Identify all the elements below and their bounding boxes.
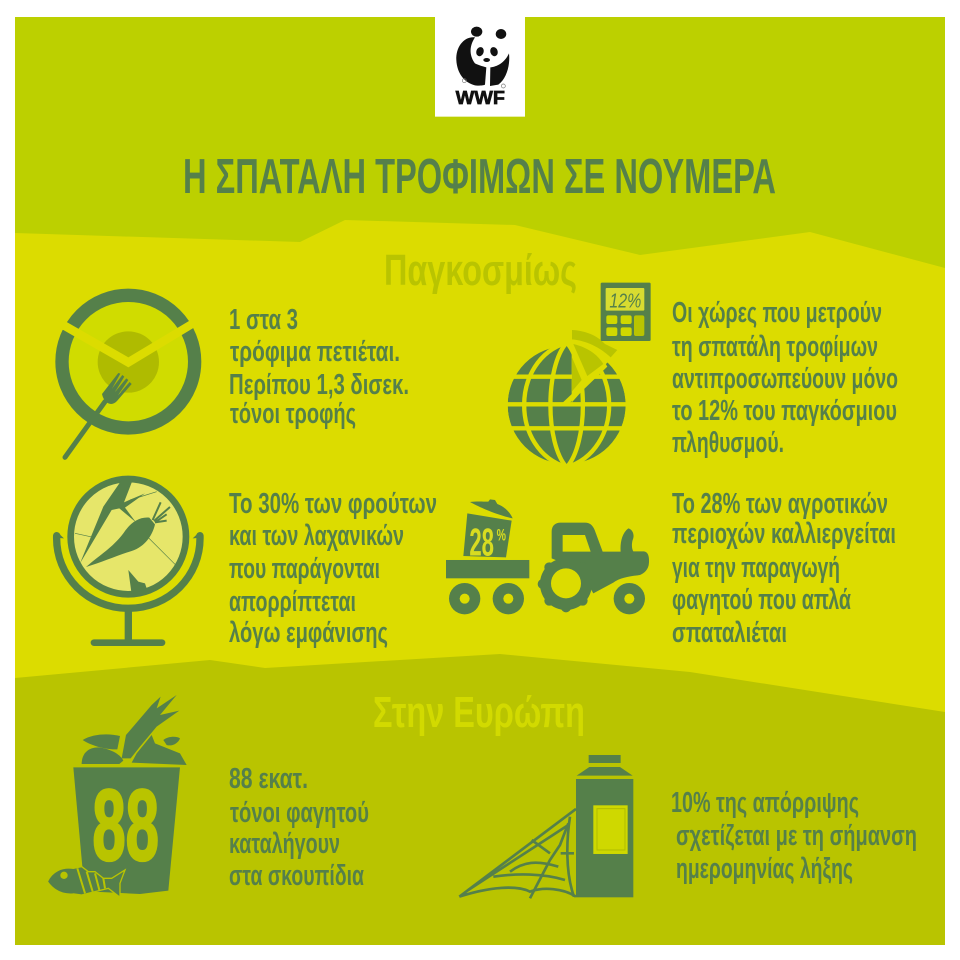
text: 1 in 3: τρόφιμα πετιέται. bbox=[230, 336, 400, 368]
text: 88 million tonnes: καταλήγουν bbox=[229, 828, 340, 860]
text: 30 percent of fruits and vegetables: λόγω εμφάνισης bbox=[229, 617, 388, 649]
heading: Europe: Στην Ευρώπη bbox=[373, 688, 585, 737]
WWF logo: WWF bbox=[456, 87, 505, 108]
top background band bbox=[15, 17, 945, 277]
text: 1 in 3 bbox=[229, 304, 409, 430]
text: 10 percent date labelling: 10% της απόρριψης bbox=[671, 787, 859, 819]
heading: global: Παγκοσμίως bbox=[384, 246, 577, 295]
text: 88 million tonnes bbox=[229, 763, 369, 892]
text: 28 percent of agricultural areas bbox=[672, 488, 896, 649]
text: 1 in 3: 1 στα 3 bbox=[229, 304, 298, 336]
text: 10 percent date labelling bbox=[671, 787, 917, 885]
icon: trash bin with 88: 88 bbox=[92, 769, 159, 882]
text: 10 percent date labelling: ημερομηνίας λήξης bbox=[676, 853, 853, 885]
text: 28 percent of agricultural areas: για την παραγωγή bbox=[672, 552, 840, 584]
text: 28 percent of agricultural areas: φαγητού που απλά bbox=[672, 584, 851, 616]
text: 30 percent of fruits and vegetables bbox=[229, 488, 437, 649]
text: countries measuring waste bbox=[672, 297, 898, 459]
text: 88 million tonnes: τόνοι φαγητού bbox=[230, 797, 369, 829]
icon: globe with calculator: 12% bbox=[609, 290, 641, 313]
text: 30 percent of fruits and vegetables: που παράγονται bbox=[229, 553, 380, 585]
text: 1 in 3: τόνοι τροφής bbox=[230, 398, 356, 430]
text: 30 percent of fruits and vegetables: και των λαχανικών bbox=[229, 520, 404, 552]
icon: carton with cobweb bbox=[459, 755, 633, 898]
text: 28 percent of agricultural areas: σπαταλιέται bbox=[672, 617, 787, 649]
middle background band bbox=[15, 220, 945, 720]
icon: tractor with bin bbox=[446, 499, 649, 614]
text: 88 million tonnes: 88 εκατ. bbox=[229, 763, 308, 795]
icon: broken mirror with carrot bbox=[54, 479, 203, 643]
text: 88 million tonnes: στα σκουπίδια bbox=[229, 860, 364, 892]
icon: globe with calculator bbox=[503, 283, 651, 467]
text: 1 in 3: Περίπου 1,3 δισεκ. bbox=[229, 369, 409, 401]
WWF logo bbox=[435, 10, 525, 117]
bottom background band bbox=[15, 654, 945, 945]
icon: tractor with bin: % bbox=[497, 526, 506, 545]
text: 30 percent of fruits and vegetables: Το 30% των φρούτων bbox=[229, 488, 437, 520]
text: countries measuring waste: πληθυσμού. bbox=[672, 427, 784, 459]
text: 30 percent of fruits and vegetables: απορρίπτεται bbox=[229, 586, 356, 618]
icon: tractor with bin: 28 bbox=[469, 520, 494, 564]
icon: plate with fork bbox=[50, 295, 207, 457]
icon: trash bin with 88 bbox=[47, 695, 187, 897]
